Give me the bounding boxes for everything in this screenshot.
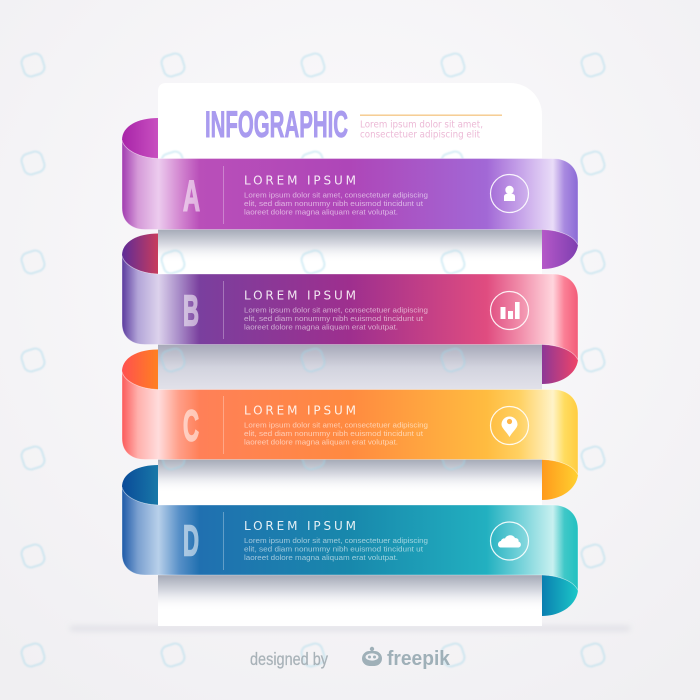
ribbon A back fold left	[122, 118, 158, 158]
subtitle text: Lorem ipsum dolor sit amet,	[360, 120, 483, 130]
icon: freepik mascot	[362, 647, 382, 666]
ribbon D heading: LOREM IPSUM	[244, 519, 356, 533]
ribbon C back fold right	[542, 460, 578, 500]
title rule	[360, 114, 502, 116]
ribbon B divider	[223, 281, 224, 339]
ribbon B body	[244, 306, 428, 332]
ribbon B back fold right	[542, 344, 578, 384]
ribbon D back fold right	[542, 575, 578, 616]
ribbon C back fold left	[122, 350, 158, 390]
subtitle text: consectetuer adipiscing elit	[360, 130, 480, 140]
ribbon D body: laoreet dolore magna aliquam erat volutpat.	[244, 553, 398, 562]
ribbon B body: laoreet dolore magna aliquam erat volutpat.	[244, 322, 398, 332]
freepik credit	[250, 647, 451, 670]
ribbon B body: Lorem ipsum dolor sit amet, consectetuer adipiscing	[244, 306, 428, 314]
ribbon C letter: C	[183, 402, 199, 450]
ribbon D	[122, 465, 578, 616]
white paper card	[158, 83, 542, 626]
icon: person	[490, 174, 528, 212]
watermark pattern	[20, 52, 606, 668]
ribbon C body: laoreet dolore magna aliquam erat volutpat.	[244, 438, 398, 446]
ribbon D divider	[223, 512, 224, 570]
ribbon B	[122, 234, 578, 384]
card shadow on the floor	[70, 626, 630, 631]
ribbon A letter: A	[183, 172, 200, 220]
ribbon A divider	[223, 166, 224, 224]
ribbon A body: laoreet dolore magna aliquam erat volutpat.	[244, 208, 398, 216]
ribbon A body	[244, 190, 428, 216]
ribbon A body: elit, sed diam nonummy nibh euismod tincidunt ut	[244, 199, 423, 208]
ribbon D back fold left	[122, 465, 158, 505]
ribbon C heading: LOREM IPSUM	[244, 404, 356, 418]
credit text: designed by	[250, 649, 328, 669]
ribbon A	[122, 118, 578, 269]
ribbon B letter: B	[183, 286, 199, 336]
ribbon A heading: LOREM IPSUM	[244, 174, 356, 188]
ribbon D body: Lorem ipsum dolor sit amet, consectetuer adipiscing	[244, 536, 428, 545]
ribbon D letter: D	[183, 516, 199, 566]
title: INFOGRAPHIC	[205, 104, 348, 145]
ribbon B heading: LOREM IPSUM	[244, 288, 356, 302]
freepik wordmark: freepik	[387, 648, 451, 670]
ribbon A band	[122, 140, 578, 245]
band shadows on the card	[158, 229, 542, 611]
ribbon C body	[244, 420, 428, 446]
ribbon D body: elit, sed diam nonummy nibh euismod tincidunt ut	[244, 544, 423, 554]
ribbon A back fold right	[542, 230, 578, 269]
ribbon B back fold left	[122, 234, 158, 274]
icon: map pin	[490, 406, 528, 444]
icon: cloud	[490, 522, 528, 560]
ribbon C body: elit, sed diam nonummy nibh euismod tincidunt ut	[244, 429, 423, 438]
ribbon D band	[122, 487, 578, 590]
ribbon B band	[122, 256, 578, 360]
icon: bar chart	[490, 292, 528, 330]
ribbon C band	[122, 372, 578, 475]
ribbon A body: Lorem ipsum dolor sit amet, consectetuer adipiscing	[244, 190, 428, 200]
ribbon D body	[244, 536, 428, 562]
ribbon C divider	[223, 396, 224, 454]
ribbon C	[122, 350, 578, 500]
subtitle text	[360, 120, 483, 140]
ribbon C body: Lorem ipsum dolor sit amet, consectetuer adipiscing	[244, 420, 428, 430]
ribbon B body: elit, sed diam nonummy nibh euismod tincidunt ut	[244, 314, 423, 323]
